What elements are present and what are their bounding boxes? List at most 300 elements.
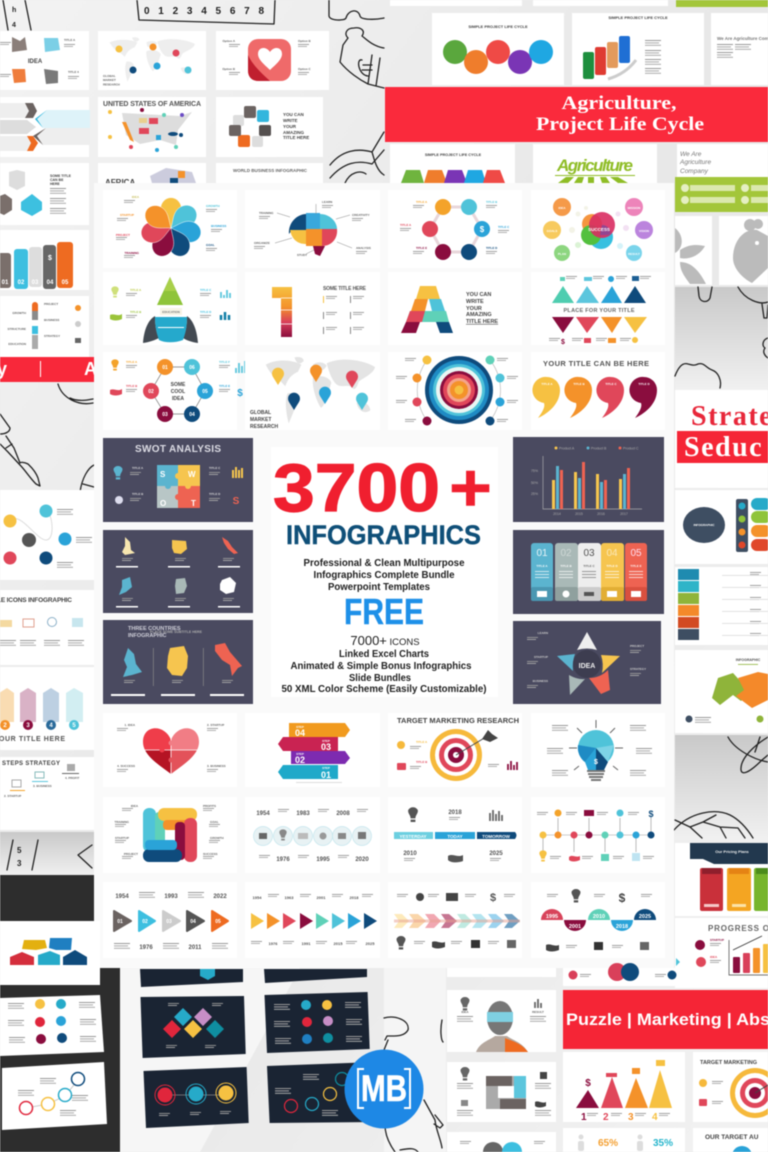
- card: world business: WORLD BUSINESS INFOGRAPHIC: [233, 168, 308, 173]
- panel: some cool idea: [103, 352, 245, 430]
- card: agriculture logo: [533, 144, 657, 183]
- card: five tabs: 03: [32, 280, 39, 286]
- card: you can write: YOU CAN: [283, 112, 304, 117]
- panel: some cool idea: TITLE B: [126, 384, 138, 388]
- card: vertical timeline: GROWTH: [12, 311, 26, 315]
- panel: yesterday today tomorrow: TODAY: [447, 834, 463, 839]
- panel: five triangle timeline: 2011: [188, 945, 202, 951]
- panel: five step boxes: 05: [630, 548, 642, 559]
- card: strips under main: [447, 963, 685, 986]
- card: idea: TITLE A: [64, 38, 76, 42]
- card: world business: [216, 163, 323, 183]
- panel: eight triangle timeline: 2025: [366, 941, 375, 946]
- heading: 3700+: +: [449, 450, 492, 526]
- panel: rocket: [103, 272, 237, 345]
- card: Africa: [98, 163, 206, 187]
- card: world map: RESEARCH: [103, 82, 120, 86]
- card: diamonds slide: [140, 996, 246, 1058]
- card: head row bottom: [447, 1132, 556, 1152]
- sketch: number ruler: [137, 0, 275, 24]
- panel: five triangle timeline: 1954: [115, 894, 129, 900]
- panel: SWOT analysis: T: [191, 499, 196, 508]
- panel: ring of circles: TITLE E: [416, 246, 427, 250]
- card: heart options: Option B: [222, 67, 236, 71]
- card: progress chart: STARTUP: [710, 938, 724, 942]
- panel: four step ribbon: 03: [321, 742, 331, 752]
- sketch: pen marks top left: [3, 0, 31, 30]
- panel: bar chart: Product C: [623, 446, 639, 450]
- card: idea: TITLE 4: [68, 70, 79, 74]
- panel: swirl square: [103, 797, 237, 873]
- card: vertical timeline: BUSINESS: [44, 318, 59, 322]
- panel: steps strategy: 3. BUSINESS: [33, 784, 52, 788]
- sketch: right middle doodles: [675, 287, 768, 390]
- card: you can write: YOUR: [283, 124, 297, 129]
- panel: hex tabs: 5: [72, 723, 76, 729]
- panel: letter A: [388, 272, 522, 345]
- panel: SWOT analysis: S: [160, 470, 166, 479]
- card: United States map: UNITED STATES OF AMERICA: [103, 101, 201, 108]
- panel: five triangle timeline: 05: [215, 919, 221, 925]
- panel: dot timeline: $: [648, 809, 654, 819]
- panel: dot timeline: [531, 797, 665, 873]
- panel: flower infographic: [103, 190, 237, 268]
- panel: brain puzzle: ANALYSIS: [356, 246, 371, 250]
- panel: brain puzzle: LEARN: [322, 200, 332, 204]
- panel: success cluster: VISION: [639, 229, 649, 233]
- panel: rocket: TITLE A: [130, 288, 142, 292]
- card: five tabs: $: [48, 255, 52, 262]
- card: five tabs: 02: [18, 280, 25, 286]
- card: triangle columns: 2: [603, 1112, 609, 1123]
- panel: heart puzzle: [116, 724, 226, 774]
- panel: some cool idea: 02: [148, 389, 154, 395]
- panel: five step boxes: 04: [606, 548, 618, 559]
- card: we are agriculture: [711, 13, 768, 85]
- panel: target marketing research: TITLE B: [416, 760, 428, 764]
- panel: steps strategy: [0, 757, 94, 830]
- panel: center title box: [271, 447, 498, 697]
- panel: top right collage: [385, 0, 768, 285]
- panel: four step ribbon: 04: [295, 728, 305, 738]
- panel: dark bottom left: [0, 875, 120, 1152]
- panel: brain puzzle: CREATIVITY: [352, 213, 370, 217]
- panel: some cool idea: 03: [162, 412, 168, 418]
- card: some title hexes: [0, 163, 89, 225]
- card: heart options: Option C: [298, 67, 311, 71]
- panel: rocket: EDUCATION: [162, 310, 180, 314]
- panel: three countries infographic: THREE COUNTRIES: [128, 626, 181, 632]
- panel: success cluster: SUCCESS: [588, 227, 610, 232]
- panel: target marketing research: [388, 713, 522, 787]
- panel: idea star: [513, 621, 661, 704]
- panel: six country maps: [103, 530, 253, 613]
- card: some title hexes: SOME TITLE: [50, 174, 72, 178]
- card: progress chart: [675, 918, 768, 988]
- panel: your title can be here: TITLE B: [573, 382, 585, 386]
- panel: bar chart: 25%: [531, 492, 538, 496]
- panel: left infinity collage: [0, 490, 94, 580]
- panel: wave years timeline: $: [619, 891, 626, 905]
- panel: letter A: AMAZING: [466, 312, 492, 318]
- card: five tabs: 01: [2, 280, 9, 286]
- banner: puzzle marketing: Puzzle | Marketing | Abs: [566, 1011, 768, 1029]
- sketch: pen marks top left: h: [12, 7, 16, 14]
- panel: some cool idea: TITLE E: [219, 384, 230, 388]
- panel: letter A: TITLE HERE: [466, 319, 498, 325]
- sketch: pen marks top left: 4: [12, 22, 16, 29]
- card: puzzle square: [447, 1062, 556, 1122]
- panel: flower infographic: TRAINING: [124, 251, 140, 255]
- panel: four step ribbon: STEP: [322, 766, 330, 770]
- panel: wave years timeline: 2010: [593, 914, 605, 920]
- panel: eight triangle timeline: 2018: [350, 895, 359, 900]
- panel: some cool idea: TITLE A: [126, 360, 138, 364]
- panel: flower infographic: GOAL: [206, 243, 215, 247]
- panel: three countries infographic: PLACE SOME SUBTITLE HERE: [150, 630, 203, 634]
- card: world map: [98, 31, 206, 90]
- text block: description: [304, 558, 465, 593]
- panel: five triangle timeline: [103, 882, 237, 958]
- panel: SWOT analysis: SWOT ANALYSIS: [135, 444, 221, 455]
- panel: triangles title: $: [561, 339, 565, 346]
- card: simple project life cycle, circles: [432, 13, 564, 85]
- panel: eight triangle timeline: 1963: [285, 895, 294, 900]
- panel: rocket: TITLE C: [200, 288, 212, 292]
- panel: SWOT analysis: TITLE B: [132, 492, 144, 496]
- card: ring line slide: [2, 1062, 107, 1130]
- panel: five triangle timeline: 1993: [164, 894, 178, 900]
- panel: ring of circles: $: [480, 225, 485, 234]
- text block: features: Slide Bundles: [349, 673, 411, 684]
- panel: brain puzzle: TRAINING: [259, 211, 274, 215]
- panel: some cool idea: SOME: [171, 382, 186, 388]
- panel: three countries infographic: [103, 620, 253, 704]
- card: simple project life cycle, cylinders: SIMPLE PROJECT LIFE CYCLE: [608, 15, 668, 20]
- panel: flower infographic: STARTUP: [120, 213, 134, 217]
- card: heart options: Option B: [298, 39, 311, 43]
- card: progress chart: PROGRESS O: [708, 924, 768, 933]
- card: pills: [675, 490, 768, 564]
- panel: swirl square: PROFITS: [203, 804, 216, 808]
- panel: swirl square: IDEA: [131, 804, 139, 808]
- banner: puzzle marketing: [563, 990, 768, 1049]
- panel: heart puzzle: 2. STARTUP: [207, 723, 224, 727]
- panel: hex tabs: 4: [49, 723, 53, 729]
- panel: right column collage: [447, 390, 768, 1152]
- panel: four step ribbon: 02: [295, 755, 305, 765]
- panel: bar chart: Product A: [559, 446, 575, 450]
- panel: dark slides bottom center: [140, 969, 378, 1128]
- card: handshake: INFOGRAPHIC: [736, 658, 761, 662]
- panel: yesterday today tomorrow: TOMORROW: [482, 834, 511, 839]
- panel: heart puzzle: 1. IDEA: [124, 723, 136, 727]
- card: vertical timeline: STRATEGY: [44, 334, 60, 338]
- card: percent audience: [563, 1128, 685, 1152]
- card: six circles slide: [0, 995, 104, 1056]
- card: heart options: Option A: [222, 39, 236, 43]
- card: pills: INFOGRAPHIC: [694, 523, 715, 527]
- panel: idea star: BUSINESS: [533, 679, 548, 683]
- panel: brain puzzle: STUDY: [297, 253, 307, 257]
- card: puzzle head: RESULT: [532, 1010, 544, 1014]
- panel: letter A: WRITE: [466, 299, 484, 305]
- panel: wave timeline years: [245, 797, 380, 873]
- panel: some cool idea: COOL: [171, 389, 185, 395]
- panel: ring of circles: TITLE C: [498, 225, 510, 229]
- panel: light bulb: $: [594, 759, 598, 766]
- card: simple project life cycle, cylinders: [572, 13, 704, 85]
- panel: ring of circles: TITLE A: [416, 200, 428, 204]
- sketch: bottom center hand: [384, 1017, 443, 1152]
- panel: wave years timeline: 2025: [639, 914, 651, 920]
- panel: global market research map: [245, 352, 380, 430]
- panel: success cluster: GOALS: [547, 229, 557, 233]
- text block: description: Powerpoint Templates: [328, 582, 430, 593]
- panel: five triangle timeline: 1976: [139, 945, 153, 951]
- panel: ring of circles: TITLE D: [486, 246, 498, 250]
- card: you can write: [216, 97, 323, 157]
- panel: your title can be here: TITLE A: [541, 382, 553, 386]
- card: you can write: TITLE HERE: [283, 135, 309, 140]
- panel: target marketing research: TITLE A: [416, 740, 428, 744]
- panel: your title can be here: TITLE C: [605, 382, 617, 386]
- panel: eight triangle timeline: 2001: [317, 895, 326, 900]
- card: target marketing small: [693, 1052, 768, 1122]
- panel: three countries infographic: INFOGRAPHIC: [128, 633, 167, 639]
- card: heart options: [216, 31, 329, 90]
- card: triangle columns: 4: [652, 1112, 658, 1123]
- card: triangle columns: $: [585, 1078, 591, 1089]
- panel: wave years timeline: [531, 882, 665, 958]
- banner: agriculture: Project Life Cycle: [536, 114, 704, 135]
- panel: eight triangle timeline: 2015: [334, 941, 343, 946]
- panel: triangles title: [531, 272, 665, 346]
- panel: five step boxes: [513, 530, 664, 614]
- panel: wave years timeline: 1995: [546, 914, 558, 920]
- card: progress chart: IDEA: [710, 955, 718, 959]
- text block: features: [282, 633, 486, 695]
- panel: ring of circles: TITLE B: [486, 200, 498, 204]
- panel: eight triangle timeline: 1991: [302, 941, 311, 946]
- panel: some cool idea: 05: [202, 389, 208, 395]
- panel: SWOT analysis: S: [233, 496, 240, 507]
- card: chicken: [719, 216, 768, 285]
- panel: concentric target: [388, 352, 522, 430]
- panel: main collage backdrop: [94, 183, 674, 968]
- card: handshake: [675, 650, 768, 733]
- panel: SWOT analysis: W: [188, 470, 196, 479]
- panel: swirl square: PROJECT: [124, 852, 138, 856]
- panel: brain puzzle: ORGANIZE: [254, 241, 270, 245]
- panel: your title can be here: TITLE D: [638, 382, 650, 386]
- panel: global market research map: MARKET: [250, 417, 271, 423]
- card: hexagon row: SIMPLE PROJECT LIFE CYCLE: [425, 153, 482, 157]
- panel: arrow chain: $: [490, 892, 496, 904]
- text block: features: Linked Excel Charts: [339, 649, 429, 660]
- panel: four step ribbon: STEP: [296, 752, 304, 756]
- card: we are company: [677, 144, 768, 178]
- panel: SWOT analysis: TITLE D: [209, 492, 221, 496]
- card: three rings slide: [144, 1067, 249, 1128]
- panel: your title can be here: YOUR TITLE CAN BE HERE: [543, 359, 649, 368]
- panel: hex tabs: [0, 667, 94, 750]
- panel: your title can be here: [531, 352, 665, 430]
- panel: heart puzzle: 3. BUSINESS: [207, 764, 226, 768]
- panel: flower infographic: GROWTH: [206, 204, 220, 208]
- card: vertical timeline: EDUCATION: [8, 342, 26, 346]
- sketch: left middle pencil: [0, 384, 94, 492]
- panel: number one: [245, 272, 380, 345]
- panel: SWOT analysis: O: [160, 499, 166, 508]
- panel: success cluster: PLAN: [558, 252, 566, 256]
- panel: flower infographic: BUSINESS: [211, 224, 226, 228]
- card: our target audience: OUR TARGET AU: [705, 1134, 759, 1141]
- panel: letter A: YOUR: [466, 306, 482, 312]
- panel: bar chart: Product B: [591, 446, 607, 450]
- panel: eight triangle timeline: [245, 882, 380, 958]
- heading: 3700+: 3700: [273, 450, 440, 526]
- card: leaf: [675, 216, 712, 285]
- green box: [675, 177, 768, 212]
- card: idea: IDEA: [28, 59, 43, 65]
- card: we are company: Agriculture: [679, 159, 711, 166]
- card: vertical timeline: STRUCTURE: [8, 327, 26, 331]
- card: target marketing small: TARGET MARKETING: [700, 1060, 757, 1066]
- panel: success cluster: MISSION: [628, 206, 640, 210]
- panel: rocket: TITLE D: [200, 310, 212, 314]
- panel: hex tabs: OUR TITLE HERE: [0, 736, 65, 743]
- panel: steps strategy: STEPS STRATEGY: [2, 761, 60, 767]
- panel: yesterday today tomorrow: 2018: [448, 810, 462, 816]
- panel: swirl square: SUCCESS: [203, 852, 218, 856]
- panel: swirl square: TRAINING: [114, 820, 130, 824]
- card: percent audience: 65%: [598, 1138, 618, 1149]
- card: triangle columns: 1: [581, 1112, 587, 1123]
- panel: SWOT analysis: TITLE C: [209, 466, 221, 470]
- panel: success cluster: IDEA: [558, 206, 566, 210]
- panel: wave timeline years: 2020: [355, 857, 369, 863]
- panel: some cool idea: $: [237, 388, 243, 399]
- card: United States map: [98, 97, 206, 157]
- card: we are company: Company: [680, 168, 709, 175]
- panel: yesterday today tomorrow: [388, 797, 522, 873]
- card: triangle columns: [563, 1052, 685, 1123]
- panel: global market research map: GLOBAL: [250, 410, 271, 416]
- sketch: left lower: 5: [17, 846, 22, 855]
- panel: idea star: PROJECT: [630, 644, 644, 648]
- card: percent audience: 35%: [653, 1138, 673, 1149]
- heading: strategic seduction: Seduc: [684, 432, 763, 463]
- panel: five step boxes: 03: [583, 548, 595, 559]
- panel: five step boxes: TITLE B: [560, 564, 572, 568]
- panel: flower infographic: IDEA: [132, 195, 140, 199]
- sketch: left lower: 3: [17, 859, 22, 868]
- panel: bar chart: 2016: [597, 512, 605, 516]
- card: five tabs: 04: [47, 280, 54, 286]
- heading: strategic seduction: [675, 390, 768, 488]
- panel: bar chart: 50%: [531, 481, 538, 485]
- panel: idea star: IDEA: [579, 663, 595, 670]
- panel: five triangle timeline: 02: [142, 919, 148, 925]
- panel: five triangle timeline: 04: [190, 919, 196, 925]
- text block: features: 50 XML Color Scheme (Easily Customizable): [282, 684, 486, 695]
- sketch: atom and ball: [674, 735, 768, 840]
- panel: number one: SOME TITLE HERE: [323, 286, 367, 292]
- panel: arrow chain: [388, 882, 522, 958]
- panel: SWOT analysis: TITLE A: [132, 466, 144, 470]
- panel: idea star: LEARN: [538, 631, 548, 635]
- panel: five step boxes: TITLE A: [536, 564, 548, 568]
- card: pricing plan: Our Pricing Plans: [715, 849, 750, 854]
- card: Africa: AFRICA: [105, 178, 135, 187]
- panel: steps strategy: 2. STARTUP: [4, 794, 21, 798]
- panel: yesterday today tomorrow: 2025: [489, 851, 503, 857]
- card: partial slides: [140, 969, 367, 987]
- card: our target audience: [693, 1128, 768, 1152]
- card: vertical timeline: [0, 296, 89, 357]
- panel: wave timeline years: 1983: [296, 811, 310, 817]
- panel: light bulb: [531, 713, 665, 787]
- card: agriculture logo: Agriculture: [556, 156, 633, 175]
- card: pricing plan: [675, 843, 768, 916]
- panel: swirl square: STARTUP: [115, 836, 129, 840]
- sketch: left lower: [0, 832, 94, 876]
- card: six tabs: [675, 567, 768, 645]
- panel: swirl square: GOAL: [210, 820, 219, 824]
- card: puzzle head: [447, 990, 556, 1052]
- card: hexagon row: [390, 144, 515, 183]
- sketch: puzzle pieces top right of left collage: [329, 0, 384, 183]
- panel: four step ribbon: 01: [321, 770, 331, 780]
- panel: four step ribbon: [245, 713, 380, 787]
- text block: description: Infographics Complete Bundle: [314, 570, 455, 581]
- card: puzzle head: IDEA: [461, 1010, 469, 1014]
- panel: success cluster: RESULT: [628, 252, 640, 256]
- heading: 3700+: [273, 450, 492, 526]
- card: idea: [0, 31, 89, 90]
- card: triangle columns: 3: [628, 1112, 634, 1123]
- panel: wave timeline years: 2008: [336, 811, 350, 817]
- panel: ring of circles: TITLE A: [400, 223, 412, 227]
- panel: bar chart: [513, 437, 664, 522]
- panel: icons infographic: [0, 590, 94, 665]
- panel: idea star: STARTUP: [534, 655, 548, 659]
- panel: top left collage: [0, 31, 329, 382]
- panel: five triangle timeline: 01: [117, 919, 123, 925]
- panel: some cool idea: 04: [189, 412, 195, 418]
- card: you can write: WRITE: [283, 118, 298, 123]
- panel: five triangle timeline: 2022: [213, 894, 227, 900]
- panel: five step boxes: 02: [560, 548, 572, 559]
- panel: wave years timeline: 2018: [616, 924, 628, 930]
- panel: five triangle timeline: 03: [166, 919, 172, 925]
- banner: red left: A: [84, 359, 97, 379]
- panel: success cluster: [531, 190, 665, 268]
- card: five tabs: 05: [62, 280, 69, 286]
- panel: wave timeline years: 1995: [316, 857, 330, 863]
- logo: MB badge: [344, 1050, 424, 1128]
- card: arrows: [0, 97, 90, 157]
- panel: five step boxes: TITLE D: [606, 564, 618, 568]
- panel: heart puzzle: 4. SUCCESS: [117, 764, 135, 768]
- panel: brain puzzle: [245, 190, 380, 268]
- card: some title hexes: HERE: [50, 182, 60, 186]
- card: five tabs: [0, 230, 89, 290]
- panel: five step boxes: TITLE E: [630, 564, 642, 568]
- panel: four step ribbon: STEP: [296, 725, 304, 729]
- card: world map: MARKET: [103, 78, 116, 82]
